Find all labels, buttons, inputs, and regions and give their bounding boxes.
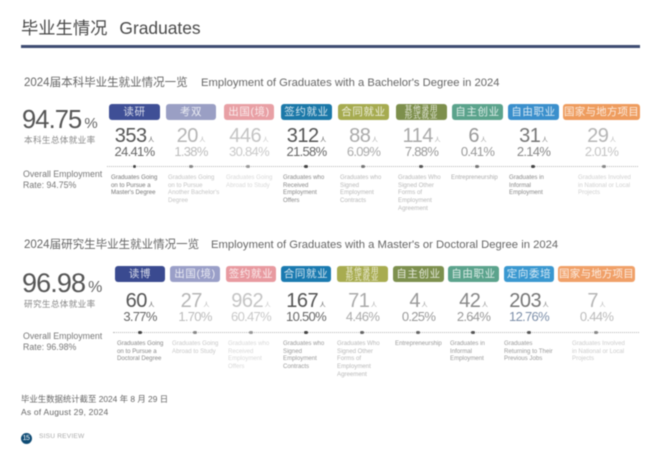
description: in National or Local bbox=[572, 348, 624, 355]
description bbox=[572, 340, 625, 363]
description: Master's Degree bbox=[111, 189, 156, 196]
percent: 0.41% bbox=[461, 144, 494, 159]
description bbox=[508, 174, 544, 196]
label pill: 读研 bbox=[123, 106, 146, 118]
description: Agreement bbox=[337, 371, 367, 378]
description bbox=[168, 174, 220, 204]
label pill: 出国(境) bbox=[174, 268, 216, 280]
description: Signed Other bbox=[398, 182, 434, 189]
label pill bbox=[224, 104, 274, 120]
marker bbox=[133, 164, 136, 168]
rate label English: Rate: 94.75% bbox=[23, 180, 76, 190]
description: Employment bbox=[509, 189, 543, 196]
marker bbox=[304, 164, 308, 168]
percent: 0.44% bbox=[580, 309, 613, 324]
count: 60人 bbox=[126, 290, 154, 312]
column: 考双 bbox=[166, 104, 220, 204]
percent: 24.41% bbox=[115, 144, 154, 159]
percent: 12.76% bbox=[509, 309, 549, 324]
percent: 3.77% bbox=[123, 309, 157, 324]
description: in National or Local bbox=[578, 182, 630, 189]
description: Graduates who bbox=[283, 340, 324, 347]
description bbox=[110, 174, 158, 196]
description: Graduates Who bbox=[398, 174, 441, 181]
rate label English: Overall Employment bbox=[23, 169, 102, 179]
label pill: 出国(境) bbox=[228, 106, 270, 118]
percent: 2.01% bbox=[585, 144, 618, 159]
description: Graduates Going bbox=[117, 340, 163, 347]
section heading: bachelor's bbox=[24, 76, 500, 90]
count: 6人 bbox=[468, 125, 487, 147]
description: Received bbox=[283, 182, 308, 189]
marker bbox=[193, 330, 197, 334]
column: 签约就业 bbox=[280, 103, 333, 204]
count: 7人 bbox=[587, 290, 606, 312]
rate label English: Overall Employment bbox=[23, 331, 102, 341]
description bbox=[398, 174, 441, 212]
column: 定向委培 bbox=[504, 266, 554, 376]
description: on to Pursue bbox=[168, 182, 203, 189]
description: Projects bbox=[572, 355, 594, 362]
marker bbox=[249, 330, 253, 334]
data cut-off note: 毕业生数据统计截至 2024 年 8 月 29 日 bbox=[21, 394, 168, 404]
description: Projects bbox=[578, 189, 600, 196]
description: Degree bbox=[168, 197, 188, 204]
description bbox=[340, 174, 382, 204]
label pill bbox=[115, 266, 165, 282]
description: Employment bbox=[283, 189, 317, 196]
label pill: 读博 bbox=[129, 268, 151, 280]
marker bbox=[419, 164, 423, 168]
percent: 30.84% bbox=[229, 144, 269, 159]
description: Received bbox=[228, 348, 253, 355]
label pill bbox=[281, 266, 331, 282]
count: 203人 bbox=[509, 290, 549, 312]
description bbox=[228, 340, 269, 371]
percent: 2.14% bbox=[517, 144, 550, 159]
percent: 4.46% bbox=[346, 309, 379, 324]
description: Employment bbox=[340, 189, 374, 196]
count: 353人 bbox=[115, 125, 154, 147]
description: Entrepreneurship bbox=[395, 340, 442, 347]
description: Doctoral Degree bbox=[117, 355, 161, 362]
description: Employment bbox=[337, 363, 371, 370]
description bbox=[450, 340, 485, 363]
description: Graduates Going bbox=[226, 174, 272, 181]
description bbox=[337, 340, 380, 379]
description: Previous Jobs bbox=[504, 355, 542, 362]
marker bbox=[527, 330, 531, 334]
marker bbox=[304, 330, 308, 334]
label pill: 自主创业 bbox=[396, 268, 441, 280]
description: on to Pursue a bbox=[111, 182, 151, 189]
marker bbox=[475, 164, 479, 168]
column: 国家与地方项目 bbox=[562, 103, 641, 196]
dotted timeline: graduate bbox=[113, 332, 639, 333]
label pill: 其他录用 bbox=[346, 266, 379, 274]
description: Contracts bbox=[283, 363, 309, 370]
overall rate: graduate bbox=[22, 268, 102, 352]
label pill: 签约就业 bbox=[284, 106, 329, 118]
description: Graduates Going bbox=[111, 174, 157, 181]
description: Offers bbox=[283, 197, 299, 204]
count: 114人 bbox=[403, 125, 440, 147]
description: Entrepreneurship bbox=[451, 174, 498, 181]
description: Graduates who bbox=[228, 340, 269, 347]
description: Employment bbox=[228, 355, 262, 362]
marker bbox=[138, 330, 142, 334]
marker bbox=[361, 164, 365, 168]
description: Forms of bbox=[337, 355, 361, 362]
description: Abroad to Study bbox=[172, 348, 216, 355]
label pill: 国家与地方项目 bbox=[564, 106, 639, 118]
overall rate: bachelor's bbox=[22, 106, 102, 190]
label pill: 合同就业 bbox=[284, 268, 328, 280]
label pill: 签约就业 bbox=[229, 268, 273, 280]
count: 31人 bbox=[519, 125, 548, 147]
description bbox=[578, 174, 631, 196]
description: Signed bbox=[283, 348, 302, 355]
description bbox=[116, 340, 164, 362]
rate label Chinese: 研究生总体就业率 bbox=[24, 299, 96, 309]
header rule bbox=[21, 45, 640, 48]
label pill bbox=[337, 266, 388, 282]
description: Employment bbox=[283, 355, 317, 362]
label pill: 形式就业 bbox=[346, 273, 379, 282]
count: 71人 bbox=[348, 290, 377, 312]
percent: 1.70% bbox=[178, 309, 212, 324]
column: 出国(境) bbox=[170, 266, 220, 355]
description: Abroad to Study bbox=[226, 182, 270, 189]
label pill: 自由职业 bbox=[511, 106, 556, 118]
count: 88人 bbox=[349, 125, 378, 147]
percent: 1.38% bbox=[174, 144, 208, 159]
description: Graduates Who bbox=[337, 340, 380, 347]
percent: 2.64% bbox=[457, 309, 490, 324]
description: Offers bbox=[228, 363, 244, 370]
description: Graduates Involved bbox=[572, 340, 625, 347]
percent: 21.58% bbox=[287, 144, 326, 159]
marker bbox=[531, 164, 535, 168]
label pill: 其他录用 bbox=[405, 104, 438, 112]
section heading: graduate: Employment of Graduates with a Master's or Doctoral Degree in 2024 bbox=[211, 239, 558, 251]
rate label English: Rate: 96.98% bbox=[23, 342, 76, 352]
column: 自由职业 bbox=[448, 266, 499, 376]
label pill: 国家与地方项目 bbox=[559, 268, 634, 280]
footer label: SISU REVIEW bbox=[39, 433, 84, 440]
description: Employment bbox=[450, 355, 484, 362]
count: 27人 bbox=[181, 290, 209, 312]
data cut-off note: As of August 29, 2024 bbox=[21, 407, 108, 417]
marker bbox=[594, 330, 598, 334]
percent: 10.50% bbox=[286, 309, 326, 324]
label pill bbox=[166, 104, 216, 120]
description: Signed bbox=[340, 182, 359, 189]
rate number: 94.75% bbox=[22, 106, 98, 134]
marker bbox=[246, 164, 250, 168]
column: 合同就业 bbox=[281, 266, 331, 376]
description bbox=[172, 340, 218, 355]
label pill: 自由职业 bbox=[451, 268, 496, 280]
description: Employment bbox=[398, 197, 432, 204]
column: 自主创业 bbox=[393, 266, 444, 376]
description: Returning to Their bbox=[504, 348, 553, 355]
page number badge bbox=[20, 432, 32, 444]
description: Forms of bbox=[398, 189, 422, 196]
marker bbox=[416, 330, 420, 334]
percent: 0.25% bbox=[402, 309, 435, 324]
data cut-off note bbox=[21, 393, 176, 419]
label pill bbox=[281, 104, 332, 120]
label pill bbox=[393, 266, 444, 282]
label pill bbox=[504, 266, 554, 282]
label pill: 合同就业 bbox=[341, 106, 386, 118]
description: Graduates bbox=[504, 340, 532, 347]
label pill: 考双 bbox=[180, 106, 202, 118]
rate label English bbox=[22, 169, 102, 190]
page number badge: 15 bbox=[23, 434, 29, 442]
description: on to Pursue a bbox=[117, 348, 157, 355]
marker bbox=[602, 164, 606, 168]
description: Graduates Going bbox=[172, 340, 218, 347]
count: 29人 bbox=[587, 125, 616, 147]
column: 签约就业 bbox=[226, 266, 276, 376]
section heading: bachelor's: Employment of Graduates with a Bachelor's Degree in 2024 bbox=[201, 77, 500, 89]
percent: 6.09% bbox=[347, 144, 380, 159]
column: 读博 bbox=[114, 265, 166, 362]
label pill bbox=[170, 266, 220, 282]
label pill: 定向委培 bbox=[507, 268, 551, 280]
label pill bbox=[508, 104, 559, 120]
description: Graduates Going bbox=[168, 174, 214, 181]
marker bbox=[360, 330, 364, 334]
column: 读研 bbox=[108, 103, 161, 196]
description: Graduates who bbox=[340, 174, 381, 181]
dotted timeline: bachelor's bbox=[107, 166, 638, 167]
label pill bbox=[452, 104, 503, 120]
description: Graduates in bbox=[509, 174, 544, 181]
count: 312人 bbox=[287, 125, 326, 147]
description: Agreement bbox=[398, 205, 428, 212]
description: Informal bbox=[450, 348, 472, 355]
label pill bbox=[396, 104, 447, 120]
column: 自主创业 bbox=[451, 103, 504, 181]
description: Contracts bbox=[340, 197, 366, 204]
column: 合同就业 bbox=[337, 103, 390, 204]
description bbox=[504, 340, 553, 363]
label pill bbox=[338, 104, 389, 120]
column: 自由职业 bbox=[507, 103, 560, 196]
description bbox=[282, 174, 325, 204]
count: 446人 bbox=[229, 125, 269, 147]
column: 其他录用形式就业 bbox=[395, 103, 448, 212]
label pill bbox=[448, 266, 499, 282]
column: 出国(境) bbox=[224, 104, 274, 189]
label pill: 形式就业 bbox=[405, 111, 438, 120]
description: Informal bbox=[509, 182, 531, 189]
label pill: 自主创业 bbox=[455, 106, 500, 118]
count: 962人 bbox=[231, 290, 271, 312]
count: 167人 bbox=[286, 290, 326, 312]
marker bbox=[189, 164, 193, 168]
percent: 7.88% bbox=[405, 144, 438, 159]
label pill bbox=[226, 266, 276, 282]
label pill bbox=[109, 104, 160, 120]
column: 其他录用形式就业 bbox=[337, 266, 388, 376]
marker bbox=[471, 330, 475, 334]
section heading: graduate: 2024届研究生毕业生就业情况一览 bbox=[24, 239, 199, 251]
count: 42人 bbox=[459, 290, 488, 312]
description: Graduates Involved bbox=[578, 174, 631, 181]
rate label English bbox=[22, 331, 102, 352]
description: Another Bachelor's bbox=[168, 189, 219, 196]
column: 国家与地方项目 bbox=[558, 266, 635, 376]
count: 4人 bbox=[409, 290, 428, 312]
count: 20人 bbox=[177, 125, 205, 147]
percent: 60.47% bbox=[231, 309, 271, 324]
description: Signed Other bbox=[337, 348, 373, 355]
description bbox=[283, 340, 324, 371]
rate label Chinese: 本科生总体就业率 bbox=[24, 135, 96, 145]
section heading: bachelor's: 2024届本科毕业生就业情况一览 bbox=[24, 77, 188, 89]
title: 毕业生情况 Graduates bbox=[21, 18, 201, 38]
description bbox=[226, 174, 272, 189]
section heading: graduate bbox=[24, 238, 558, 252]
rate number: 96.98% bbox=[22, 268, 102, 298]
description: Graduates in bbox=[450, 340, 485, 347]
description: Graduates who bbox=[283, 174, 324, 181]
